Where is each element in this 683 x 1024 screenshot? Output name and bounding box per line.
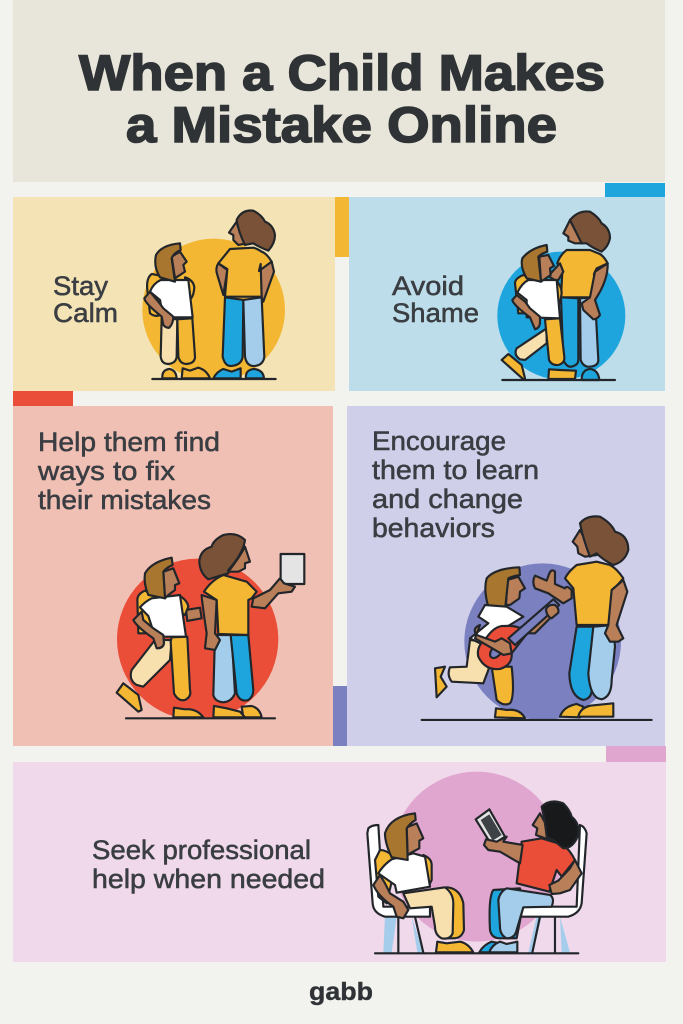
illustration: child walking with adult holding a tablet on red circle bbox=[117, 534, 304, 720]
heading: help them fix mistakes: Help them find bbox=[38, 427, 220, 457]
heading: seek professional help: help when needed bbox=[92, 864, 325, 894]
heading: avoid shame: Shame bbox=[392, 298, 479, 328]
heading: encourage them to learn and change behaviors: behaviors bbox=[372, 513, 495, 543]
panel: stay calm bbox=[13, 197, 335, 391]
accent tab: pink bbox=[606, 746, 666, 762]
illustration: child stepping beside adult on blue circle bbox=[497, 211, 625, 380]
illustration: child playing guitar with adult giving thumbs up bbox=[422, 516, 652, 720]
heading: avoid shame: Avoid bbox=[392, 271, 464, 301]
heading: help them fix mistakes: their mistakes bbox=[38, 485, 211, 515]
heading: avoid shame bbox=[392, 271, 479, 328]
accent tab: yellow bbox=[335, 197, 349, 257]
illustration: child and counsellor seated in chairs on pink circle bbox=[367, 772, 587, 953]
heading: seek professional help: Seek professional bbox=[92, 835, 311, 865]
heading: encourage them to learn and change behaviors: Encourage bbox=[372, 426, 506, 456]
accent tab: purple bbox=[333, 686, 347, 746]
heading: encourage them to learn and change behaviors: and change bbox=[372, 484, 523, 514]
title banner bbox=[13, 0, 665, 182]
logo: gabb: gabb bbox=[309, 978, 373, 1006]
panel: help them find ways to fix mistakes bbox=[13, 406, 333, 746]
accent tab: blue bbox=[605, 183, 665, 197]
heading: stay calm bbox=[53, 271, 118, 328]
title banner: a Mistake Online bbox=[126, 97, 557, 153]
accent tab: red bbox=[13, 391, 73, 406]
panel: avoid shame bbox=[349, 197, 665, 391]
panel: encourage them to learn bbox=[347, 406, 665, 746]
heading: help them fix mistakes bbox=[37, 427, 220, 515]
heading: stay calm: Calm bbox=[53, 298, 118, 328]
heading: encourage them to learn and change behaviors: them to learn bbox=[372, 455, 539, 485]
heading: help them fix mistakes: ways to fix bbox=[37, 456, 176, 486]
illustration: child and adult standing on yellow circle bbox=[142, 211, 285, 381]
heading: encourage them to learn and change behaviors bbox=[372, 426, 539, 543]
title banner: When a Child Makes bbox=[79, 45, 605, 101]
heading: seek professional help bbox=[92, 835, 325, 894]
panel: seek professional help bbox=[13, 762, 666, 962]
heading: stay calm: Stay bbox=[53, 271, 109, 301]
